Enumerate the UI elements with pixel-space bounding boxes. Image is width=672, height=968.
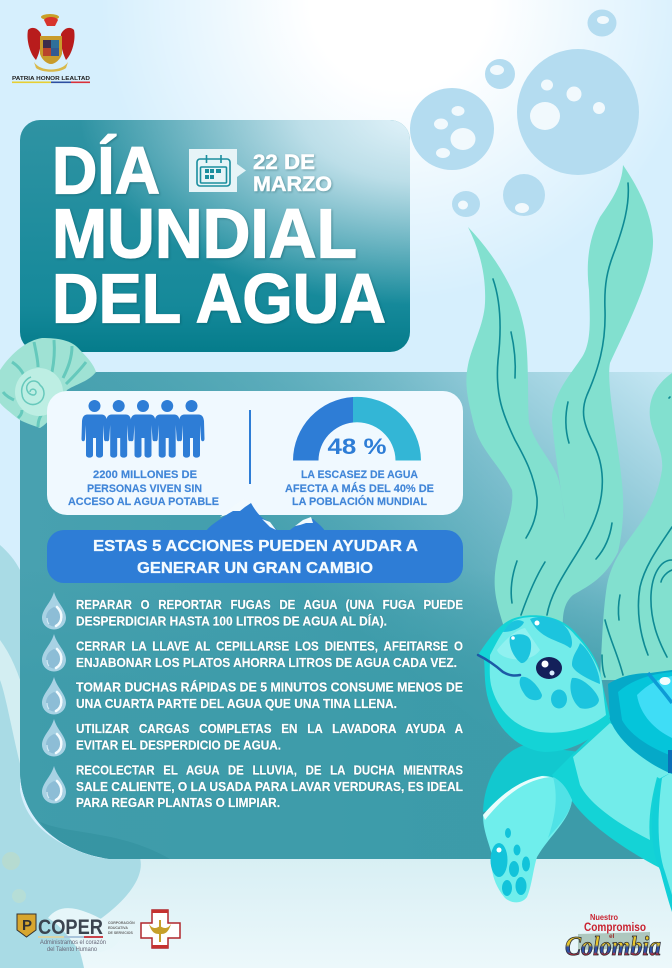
icon: water drop xyxy=(42,677,66,714)
logo: COPER: EDUCATIVA xyxy=(108,926,128,930)
mouth xyxy=(478,655,520,676)
action 4: EVITAR EL DESPERDICIO DE AGUA. xyxy=(76,738,281,752)
logo: COPER: P xyxy=(22,917,32,934)
logo: COPER: Administramos el corazón xyxy=(40,940,106,946)
action 1 xyxy=(42,592,463,630)
head spots xyxy=(503,617,600,709)
back flipper xyxy=(483,745,580,812)
gauge chart 48% xyxy=(293,397,421,460)
belly edge xyxy=(652,772,672,912)
icon: water drop xyxy=(42,592,66,630)
logo: COPER: DE SERVICIOS xyxy=(108,931,133,935)
action 3: UNA CUARTA PARTE DEL AGUA QUE UNA TINA LLENA. xyxy=(76,697,397,711)
action 5: PARA REGAR PLANTAS O LIMPIAR. xyxy=(76,796,280,810)
icon: calendar tag xyxy=(189,149,246,192)
logo: medical cross xyxy=(141,910,180,948)
action 4: UTILIZAR CARGAS COMPLETAS EN LA LAVADORA AYUDA A xyxy=(76,722,463,736)
banner xyxy=(47,530,463,583)
date: MARZO xyxy=(253,173,332,196)
shell xyxy=(608,670,672,774)
panel: actions background xyxy=(20,372,672,859)
title: MUNDIAL xyxy=(52,194,357,272)
logo: COPER: del Talento Humano xyxy=(47,947,98,953)
icon: water drop xyxy=(42,634,66,672)
icon: mountains xyxy=(206,499,325,531)
logo: Nuestro Compromiso con Colombia: Nuestro xyxy=(590,912,618,922)
date xyxy=(253,151,332,196)
title xyxy=(52,134,386,338)
logo: COPER xyxy=(17,914,135,953)
logo: coat of arms xyxy=(12,14,90,83)
logo: COPER: CORPORACIÓN xyxy=(108,920,135,925)
people statistic text xyxy=(68,469,219,508)
action 5: RECOLECTAR EL AGUA DE LLUVIA, DE LA DUCHA MIENTRAS xyxy=(76,764,463,778)
action 5 xyxy=(42,764,463,810)
action 5: SALE CALIENTE, O LA USADA PARA LAVAR VERDURAS, ES IDEAL xyxy=(76,780,463,794)
scarcity statistic text xyxy=(285,469,434,508)
action 3 xyxy=(42,677,463,714)
logo: Nuestro Compromiso con Colombia: Colombia xyxy=(565,931,661,961)
banner: GENERAR UN GRAN CAMBIO xyxy=(137,560,373,577)
action 2 xyxy=(42,634,463,672)
icon: water drop xyxy=(42,766,66,804)
icon: water drop xyxy=(42,719,66,756)
action 1: REPARAR O REPORTAR FUGAS DE AGUA (UNA FUGA PUEDE xyxy=(76,598,463,612)
people statistic text: 2200 MILLONES DE xyxy=(93,469,197,481)
title: DEL AGUA xyxy=(52,260,386,338)
decorative water waves at left xyxy=(0,545,141,968)
people statistic text: ACCESO AL AGUA POTABLE xyxy=(68,496,219,508)
action 1: DESPERDICIAR HASTA 100 LITROS DE AGUA AL DÍA). xyxy=(76,614,387,628)
turtle xyxy=(478,615,672,912)
scarcity statistic text: AFECTA A MÁS DEL 40% DE xyxy=(285,482,434,495)
gauge chart 48%: 48 % xyxy=(328,434,386,459)
body xyxy=(552,718,672,875)
logo: Nuestro Compromiso con Colombia: Compromiso xyxy=(584,920,646,934)
icon: seashell xyxy=(0,338,96,428)
logo: Nuestro Compromiso con Colombia: el xyxy=(609,933,615,940)
front flipper xyxy=(483,776,572,902)
title panel xyxy=(20,120,410,352)
logo: coat of arms: PATRIA HONOR LEALTAD xyxy=(12,76,90,82)
title: DÍA xyxy=(52,134,160,208)
head xyxy=(478,615,610,752)
eye xyxy=(536,657,562,679)
logo: COPER: COPER xyxy=(38,916,103,939)
action 4 xyxy=(42,719,463,756)
action 2: CERRAR LA LLAVE AL CEPILLARSE LOS DIENTES, AFEITARSE O xyxy=(76,640,463,654)
action 2: ENJABONAR LOS PLATOS AHORRA LITROS DE AGUA CADA VEZ. xyxy=(76,656,457,670)
seaweed xyxy=(466,165,672,680)
scarcity statistic text: LA POBLACIÓN MUNDIAL xyxy=(292,495,427,508)
seaweed veins xyxy=(493,183,672,677)
people statistic text: PERSONAS VIVEN SIN xyxy=(87,483,202,495)
banner: ESTAS 5 ACCIONES PUEDEN AYUDAR A xyxy=(93,538,418,555)
action 3: TOMAR DUCHAS RÁPIDAS DE 5 MINUTOS CONSUME MENOS DE xyxy=(76,680,463,694)
panel: statistics card xyxy=(47,391,463,515)
date: 22 DE xyxy=(253,151,315,174)
icon: five people xyxy=(82,400,204,458)
bubbles xyxy=(410,10,639,217)
scarcity statistic text: LA ESCASEZ DE AGUA xyxy=(301,469,418,481)
flipper toes xyxy=(490,828,530,896)
logo: Nuestro Compromiso con Colombia xyxy=(565,912,661,961)
